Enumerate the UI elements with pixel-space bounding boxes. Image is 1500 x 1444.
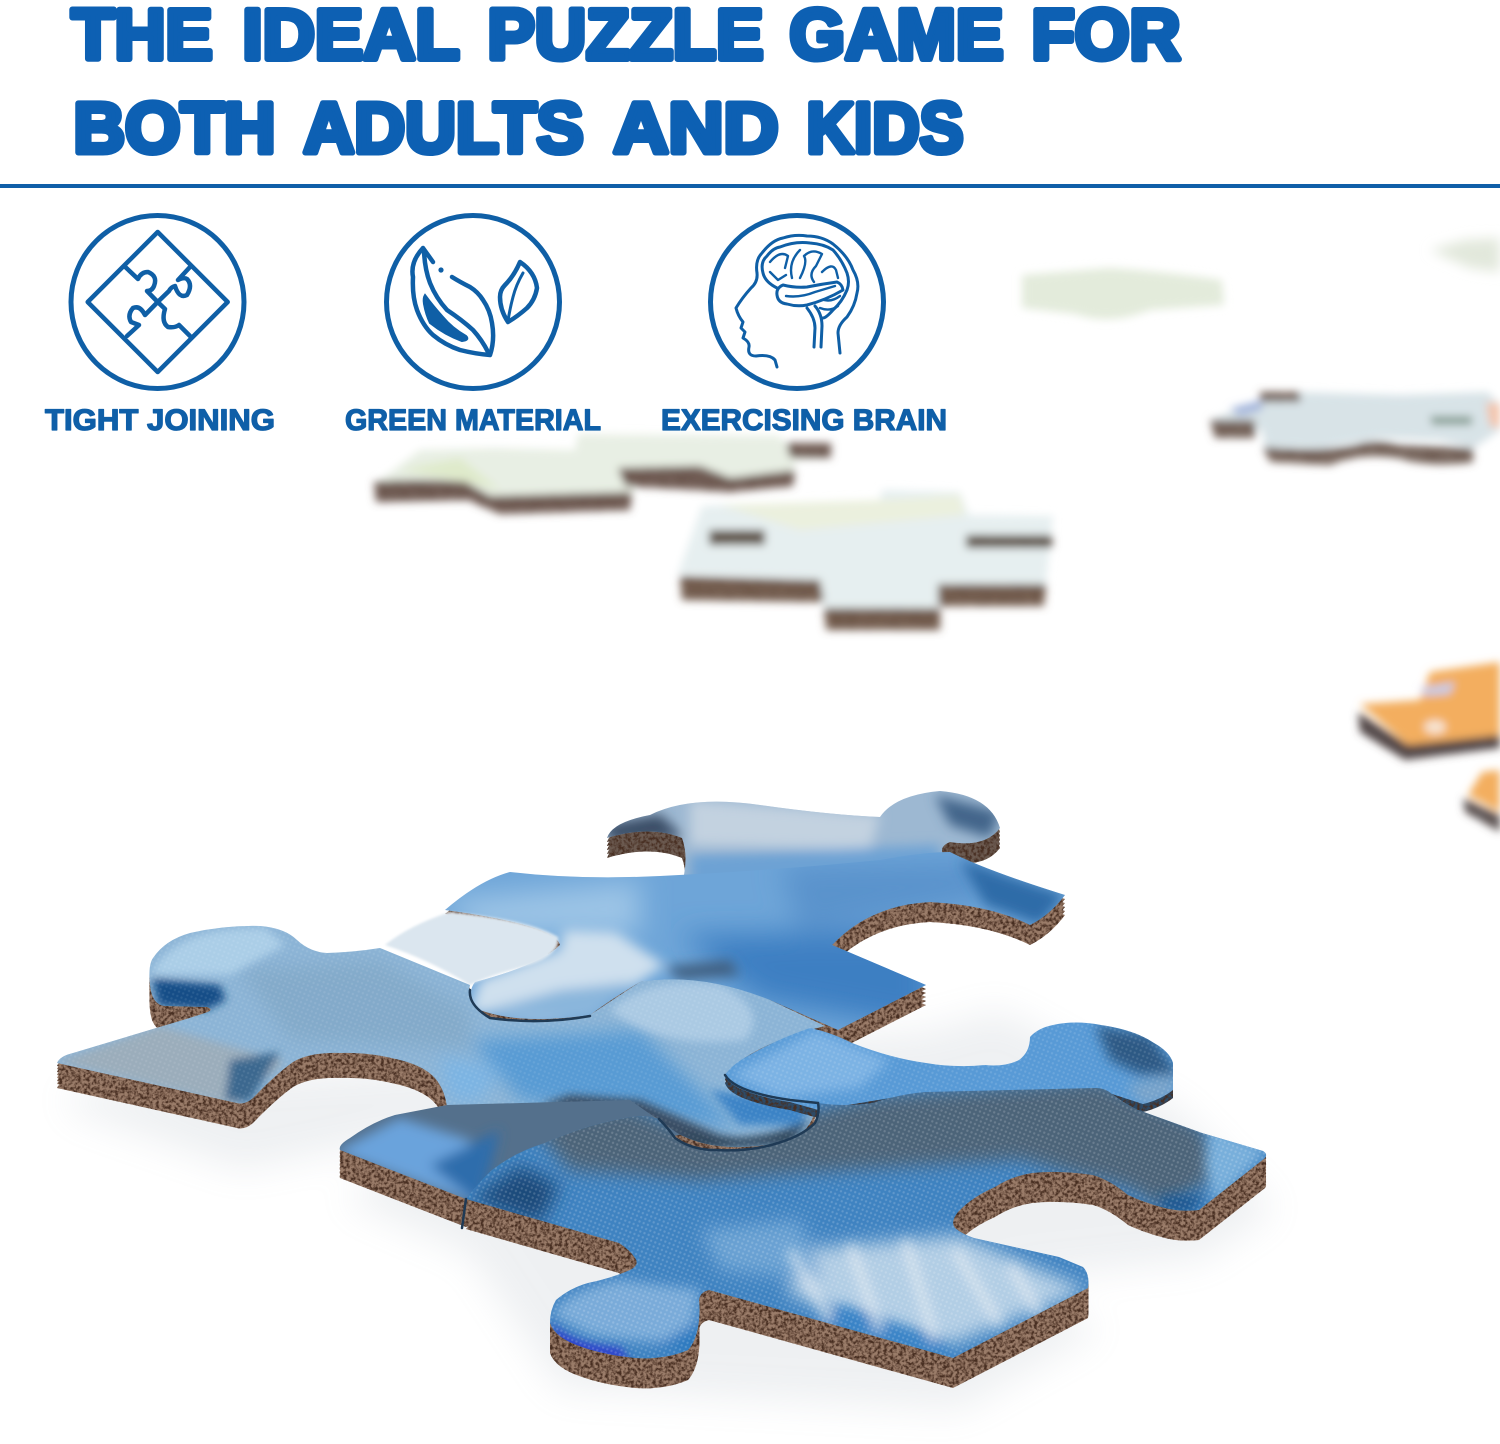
blurred piece: orange bbox=[1358, 662, 1500, 832]
puzzle piece: right arm blue bbox=[720, 1020, 1180, 1118]
label: tight joining: TIGHT JOINING bbox=[45, 404, 275, 437]
icon: green material bbox=[386, 216, 560, 388]
puzzle piece: upper blue bbox=[440, 852, 1065, 1050]
puzzle piece: middle dark bbox=[335, 1100, 680, 1227]
header rule bbox=[0, 184, 1500, 188]
icon: tight joining bbox=[71, 216, 244, 388]
label: green material: GREEN MATERIAL bbox=[345, 404, 601, 437]
seam: dark gaps between joined pieces bbox=[462, 990, 819, 1228]
puzzle piece: white highlight tab bbox=[385, 912, 558, 985]
blurred piece: pale green middle bbox=[374, 434, 831, 514]
puzzle piece: front large bbox=[460, 1080, 1280, 1388]
title bbox=[72, 0, 1180, 168]
blurred piece: pale blue with cork bbox=[678, 490, 1053, 630]
puzzle piece: back grey-blue bbox=[607, 791, 1000, 875]
blurred piece: top right bbox=[1430, 238, 1500, 272]
blurred piece: pale green upper bbox=[1022, 268, 1224, 319]
soft shadow under puzzle pieces bbox=[70, 1010, 1275, 1410]
puzzle piece: left bbox=[57, 926, 825, 1150]
title: ADULTS bbox=[304, 90, 584, 168]
label: exercising brain: EXERCISING BRAIN bbox=[661, 404, 947, 437]
title: AND bbox=[614, 90, 778, 168]
icon: exercising brain bbox=[710, 216, 884, 388]
title: KIDS bbox=[806, 90, 964, 168]
blurred piece: right with cork bbox=[1210, 392, 1500, 465]
title: BOTH bbox=[74, 90, 276, 168]
